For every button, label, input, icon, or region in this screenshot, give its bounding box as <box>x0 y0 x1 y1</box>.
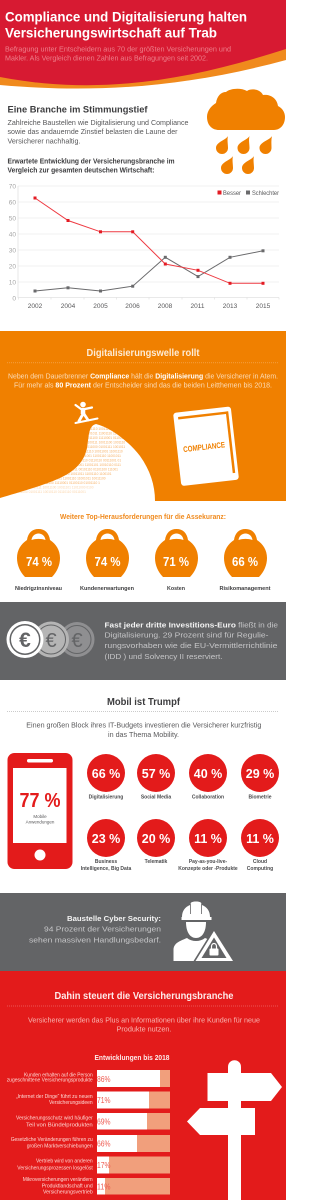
circles: mobility percentages <box>81 754 279 872</box>
line chart: 40 <box>9 232 16 238</box>
kettlebell: Kosten <box>155 529 198 592</box>
icon: phone 77% <box>8 753 72 869</box>
circles: mobility percentages: 40 % <box>194 767 222 781</box>
chart heading: Vergleich zur gesamten deutschen Wirtschaft: <box>8 168 154 174</box>
text block <box>29 914 161 944</box>
circles: mobility percentages: Pay-as-you-live- <box>189 859 228 865</box>
panel: Dahin steuert die Versicherungsbranche <box>0 971 286 1200</box>
line chart: 2015 <box>256 303 271 310</box>
title <box>5 8 247 40</box>
wave: 10011110 10011011 11001110 1100101 <box>56 472 112 476</box>
kettlebell: Niedrigzinsniveau: Niedrigzinsniveau <box>15 586 62 592</box>
line chart: 0 <box>12 296 16 302</box>
icon: compliance book: COMPLIANCE <box>183 440 226 454</box>
icon: euro coins: € <box>71 630 83 652</box>
bar chart: Entwicklungen bis 2018: Versicherungsprozessen losgelöst <box>17 1165 93 1171</box>
bar chart: Entwicklungen bis 2018: 66% <box>97 1139 110 1148</box>
circles: mobility percentages: Cloud <box>253 859 267 865</box>
kettlebell: Kundenerwartungen: 74 % <box>94 555 120 569</box>
kettlebell: Kundenerwartungen <box>80 529 135 592</box>
wave <box>0 424 155 501</box>
circles: mobility percentages: Social Media <box>141 794 171 800</box>
bar chart: Entwicklungen bis 2018: Versicherungsideen <box>49 1100 93 1106</box>
icon: surfer <box>76 402 98 423</box>
heading: Top-Herausforderungen: Weitere Top-Herausforderungen für die Assekuranz: <box>60 514 226 521</box>
icon: phone 77%: 77 % <box>20 790 61 812</box>
series: Besser <box>34 196 264 285</box>
title: Compliance und Digitalisierung halten <box>5 8 247 24</box>
wave: 10011110 10011101 1100100 <box>84 427 125 431</box>
circles: mobility percentages: Biometrie <box>248 794 272 800</box>
circles: mobility percentages: 11 % <box>246 832 274 846</box>
title: Versicherungswirtschaft auf Trab <box>5 24 217 40</box>
line chart: 30 <box>9 248 16 254</box>
text: mobility intro: in das Thema Mobility. <box>108 730 179 739</box>
circles: mobility percentages: 11 % <box>194 832 222 846</box>
circles: mobility percentages: 66 % <box>92 767 120 781</box>
wave: 10011100 11110001 0110011 <box>84 436 125 440</box>
icon: compliance book <box>173 406 239 486</box>
line chart: 20 <box>9 264 16 270</box>
circles: mobility percentages: 29 % <box>246 767 274 781</box>
wave: 00100111 10011100 1001110 <box>84 440 125 444</box>
text block: Versicherer werden das Plus an Informationen über ihre Kunden für neue <box>28 1018 260 1024</box>
text block: Digitalisierung. 29 Prozent sind für Regulie- <box>104 630 269 640</box>
bar chart: Entwicklungen bis 2018: Versicherungsschutz wird häufiger <box>16 1116 93 1122</box>
wave: 11001001 11001110 11001011 <box>78 454 121 458</box>
icon: worker with warning <box>174 902 236 964</box>
icon: euro coins: € <box>45 630 57 652</box>
text block <box>28 1018 260 1034</box>
text block: Baustelle Cyber Security: <box>67 914 161 923</box>
circles: mobility percentages: Konzepte oder -Produkte <box>178 866 238 872</box>
text: mobility intro: Einen großen Block ihres IT-Budgets investieren die Versicherer kurzfristig <box>26 720 261 730</box>
line chart <box>9 184 279 310</box>
intro text <box>8 120 189 146</box>
icon: euro coins: € <box>19 629 31 652</box>
kettlebell: Kosten: Kosten <box>167 586 186 592</box>
subtitle: Makler. Als Vergleich dienen Zahlen aus Befragungen seit 2002. <box>5 56 208 62</box>
bar chart: Entwicklungen bis 2018: zugeschnittene Versicherungsprodukte <box>7 1077 93 1083</box>
section heading: Eine Branche im Stimmungstief: Eine Branche im Stimmungstief <box>8 104 148 116</box>
bar chart: Entwicklungen bis 2018: Produktlandschaft und <box>42 1184 93 1190</box>
panel: header <box>0 0 286 89</box>
text block: Neben dem Dauerbrenner Compliance hält die Digitalisierung die Versicherer in Atem. <box>8 374 278 380</box>
wave: 11011000 01001111 10010110 01110110 00111001 <box>14 490 86 494</box>
intro text: Versicherer nachhaltig. <box>8 138 81 146</box>
heading: Mobil ist Trumpf: Mobil ist Trumpf <box>107 697 181 708</box>
kettlebell: Niedrigzinsniveau: 74 % <box>26 555 52 569</box>
bar chart: Entwicklungen bis 2018: 71% <box>97 1096 110 1105</box>
line chart: 2002 <box>28 303 43 310</box>
circles: mobility percentages: Intelligence, Big Data <box>81 866 131 872</box>
icon: signpost <box>187 1060 282 1200</box>
circles: mobility percentages: Digitalisierung <box>89 794 123 800</box>
circles: mobility percentages: 20 % <box>142 832 170 846</box>
circles: mobility percentages: Business <box>95 859 117 865</box>
wave: 10011011 00101110 01101100 111001 <box>64 468 118 472</box>
icon: euro coins <box>6 621 94 658</box>
wave: 01100110 01110110 00111001 01 <box>74 458 121 462</box>
text block: sehen massiven Handlungsbedarf. <box>29 936 161 944</box>
kettlebell: Risikomanagement: 66 % <box>232 555 258 569</box>
wave: 10011110 10011001 11001110 <box>80 450 123 454</box>
text block: rungsvorhaben wie die EU-Vermittlerrichtlinie <box>104 641 278 650</box>
kettlebell: Kundenerwartungen: Kundenerwartungen <box>80 586 135 592</box>
bar chart: Entwicklungen bis 2018: großen Marktverschiebungen <box>27 1144 93 1150</box>
line chart: 2005 <box>93 303 108 310</box>
line chart: 2008 <box>158 303 173 310</box>
bar chart: Entwicklungen bis 2018: 11% <box>97 1182 110 1191</box>
bar chart: Entwicklungen bis 2018: Versicherungsvertrieb <box>43 1190 93 1196</box>
intro text: sowie das andauernde Zinstief belasten die Laune der <box>8 129 178 136</box>
bar chart: Entwicklungen bis 2018: 69% <box>97 1117 110 1126</box>
bar chart: Entwicklungen bis 2018: „Internet der Dinge“ führt zu neuen <box>16 1094 93 1100</box>
text block: (IDD ) und Solvency II reserviert. <box>104 652 222 661</box>
wave: 10011100 11110001 01100110 01001110 1 <box>40 481 100 485</box>
text block <box>104 620 278 661</box>
text block: Für mehr als 80 Prozent der Entscheider sind das die beiden Leitthemen bis 2018. <box>14 382 272 390</box>
kettlebell: Risikomanagement <box>220 529 271 592</box>
line chart: 60 <box>9 200 16 206</box>
legend: Schlechter <box>252 191 279 197</box>
bar chart: Entwicklungen bis 2018 <box>7 1053 170 1196</box>
chart heading <box>8 158 174 174</box>
line chart: 70 <box>9 184 16 190</box>
kettlebell: Kosten: 71 % <box>163 555 189 569</box>
kettlebells <box>15 529 271 592</box>
panel: Cyber Security <box>0 893 286 971</box>
legend <box>218 190 279 197</box>
icon: phone 77%: Mobile <box>33 814 47 819</box>
text block: 94 Prozent der Versicherungen <box>44 924 161 934</box>
line chart: 50 <box>9 216 16 222</box>
panel: Investitions-Euro <box>0 602 286 680</box>
circles: mobility percentages: 57 % <box>142 767 170 781</box>
bar chart: Entwicklungen bis 2018: Mikroversicherungen verändern <box>23 1177 93 1183</box>
text: mobility intro <box>26 720 261 739</box>
circles: mobility percentages: Collaboration <box>192 794 224 800</box>
icon: rain cloud <box>207 89 285 174</box>
chart heading: Erwartete Entwicklung der Versicherungsbranche im <box>8 158 174 166</box>
line chart: 2013 <box>223 303 238 310</box>
bar chart: Entwicklungen bis 2018: 17% <box>97 1161 110 1170</box>
text block: Produkte nutzen. <box>116 1026 172 1034</box>
subtitle <box>5 46 231 62</box>
heading: Dahin steuert die Versicherungsbranche <box>54 991 234 1002</box>
kettlebell: Niedrigzinsniveau <box>15 529 62 592</box>
wave: 11001001 11001101 10010110 0111 <box>70 463 121 467</box>
bar chart: Entwicklungen bis 2018: Gesetzliche Veränderungen führen zu <box>11 1137 93 1143</box>
panel: Digitalisierungswelle <box>0 331 286 501</box>
line chart: 2004 <box>61 303 76 310</box>
text block: Fast jeder dritte Investitions-Euro fließt in die <box>104 620 278 630</box>
bar chart: Entwicklungen bis 2018: Teil von Bündelprodukten <box>26 1122 93 1128</box>
wave: 11011000 01001111 1001011 <box>84 445 125 449</box>
series: Schlechter <box>34 249 264 292</box>
wave: 11001011 11001110 1100101 <box>84 432 125 436</box>
circles: mobility percentages: Computing <box>247 866 273 872</box>
bar chart: Entwicklungen bis 2018: 86% <box>97 1075 110 1084</box>
wave: 00100111 10011100 10011101 11011000 0100 <box>28 486 94 490</box>
bar chart: Entwicklungen bis 2018: Kunden erhalten auf die Person <box>24 1072 93 1078</box>
line chart: 10 <box>9 280 16 286</box>
circles: mobility percentages: 23 % <box>92 832 120 846</box>
intro text: Zahlreiche Baustellen wie Digitalisierung und Compliance <box>8 120 189 127</box>
subtitle: Befragung unter Entscheidern aus 70 der größten Versicherungen und <box>5 46 231 54</box>
wave: 11001001 11001110 11001011 10011100 <box>48 476 106 480</box>
line chart: 2006 <box>125 303 140 310</box>
circles: mobility percentages: Telematik <box>145 859 168 865</box>
text block <box>8 374 278 390</box>
icon: phone 77%: Anwendungen <box>26 820 55 824</box>
line chart: 2011 <box>191 303 205 310</box>
bar chart: Entwicklungen bis 2018: Entwicklungen bis 2018 <box>94 1053 170 1062</box>
kettlebell: Risikomanagement: Risikomanagement <box>220 586 271 592</box>
bar chart: Entwicklungen bis 2018: Vertrieb wird von anderen <box>36 1159 93 1165</box>
heading: Digitalisierungswelle rollt <box>86 348 200 359</box>
legend: Besser <box>223 191 241 197</box>
